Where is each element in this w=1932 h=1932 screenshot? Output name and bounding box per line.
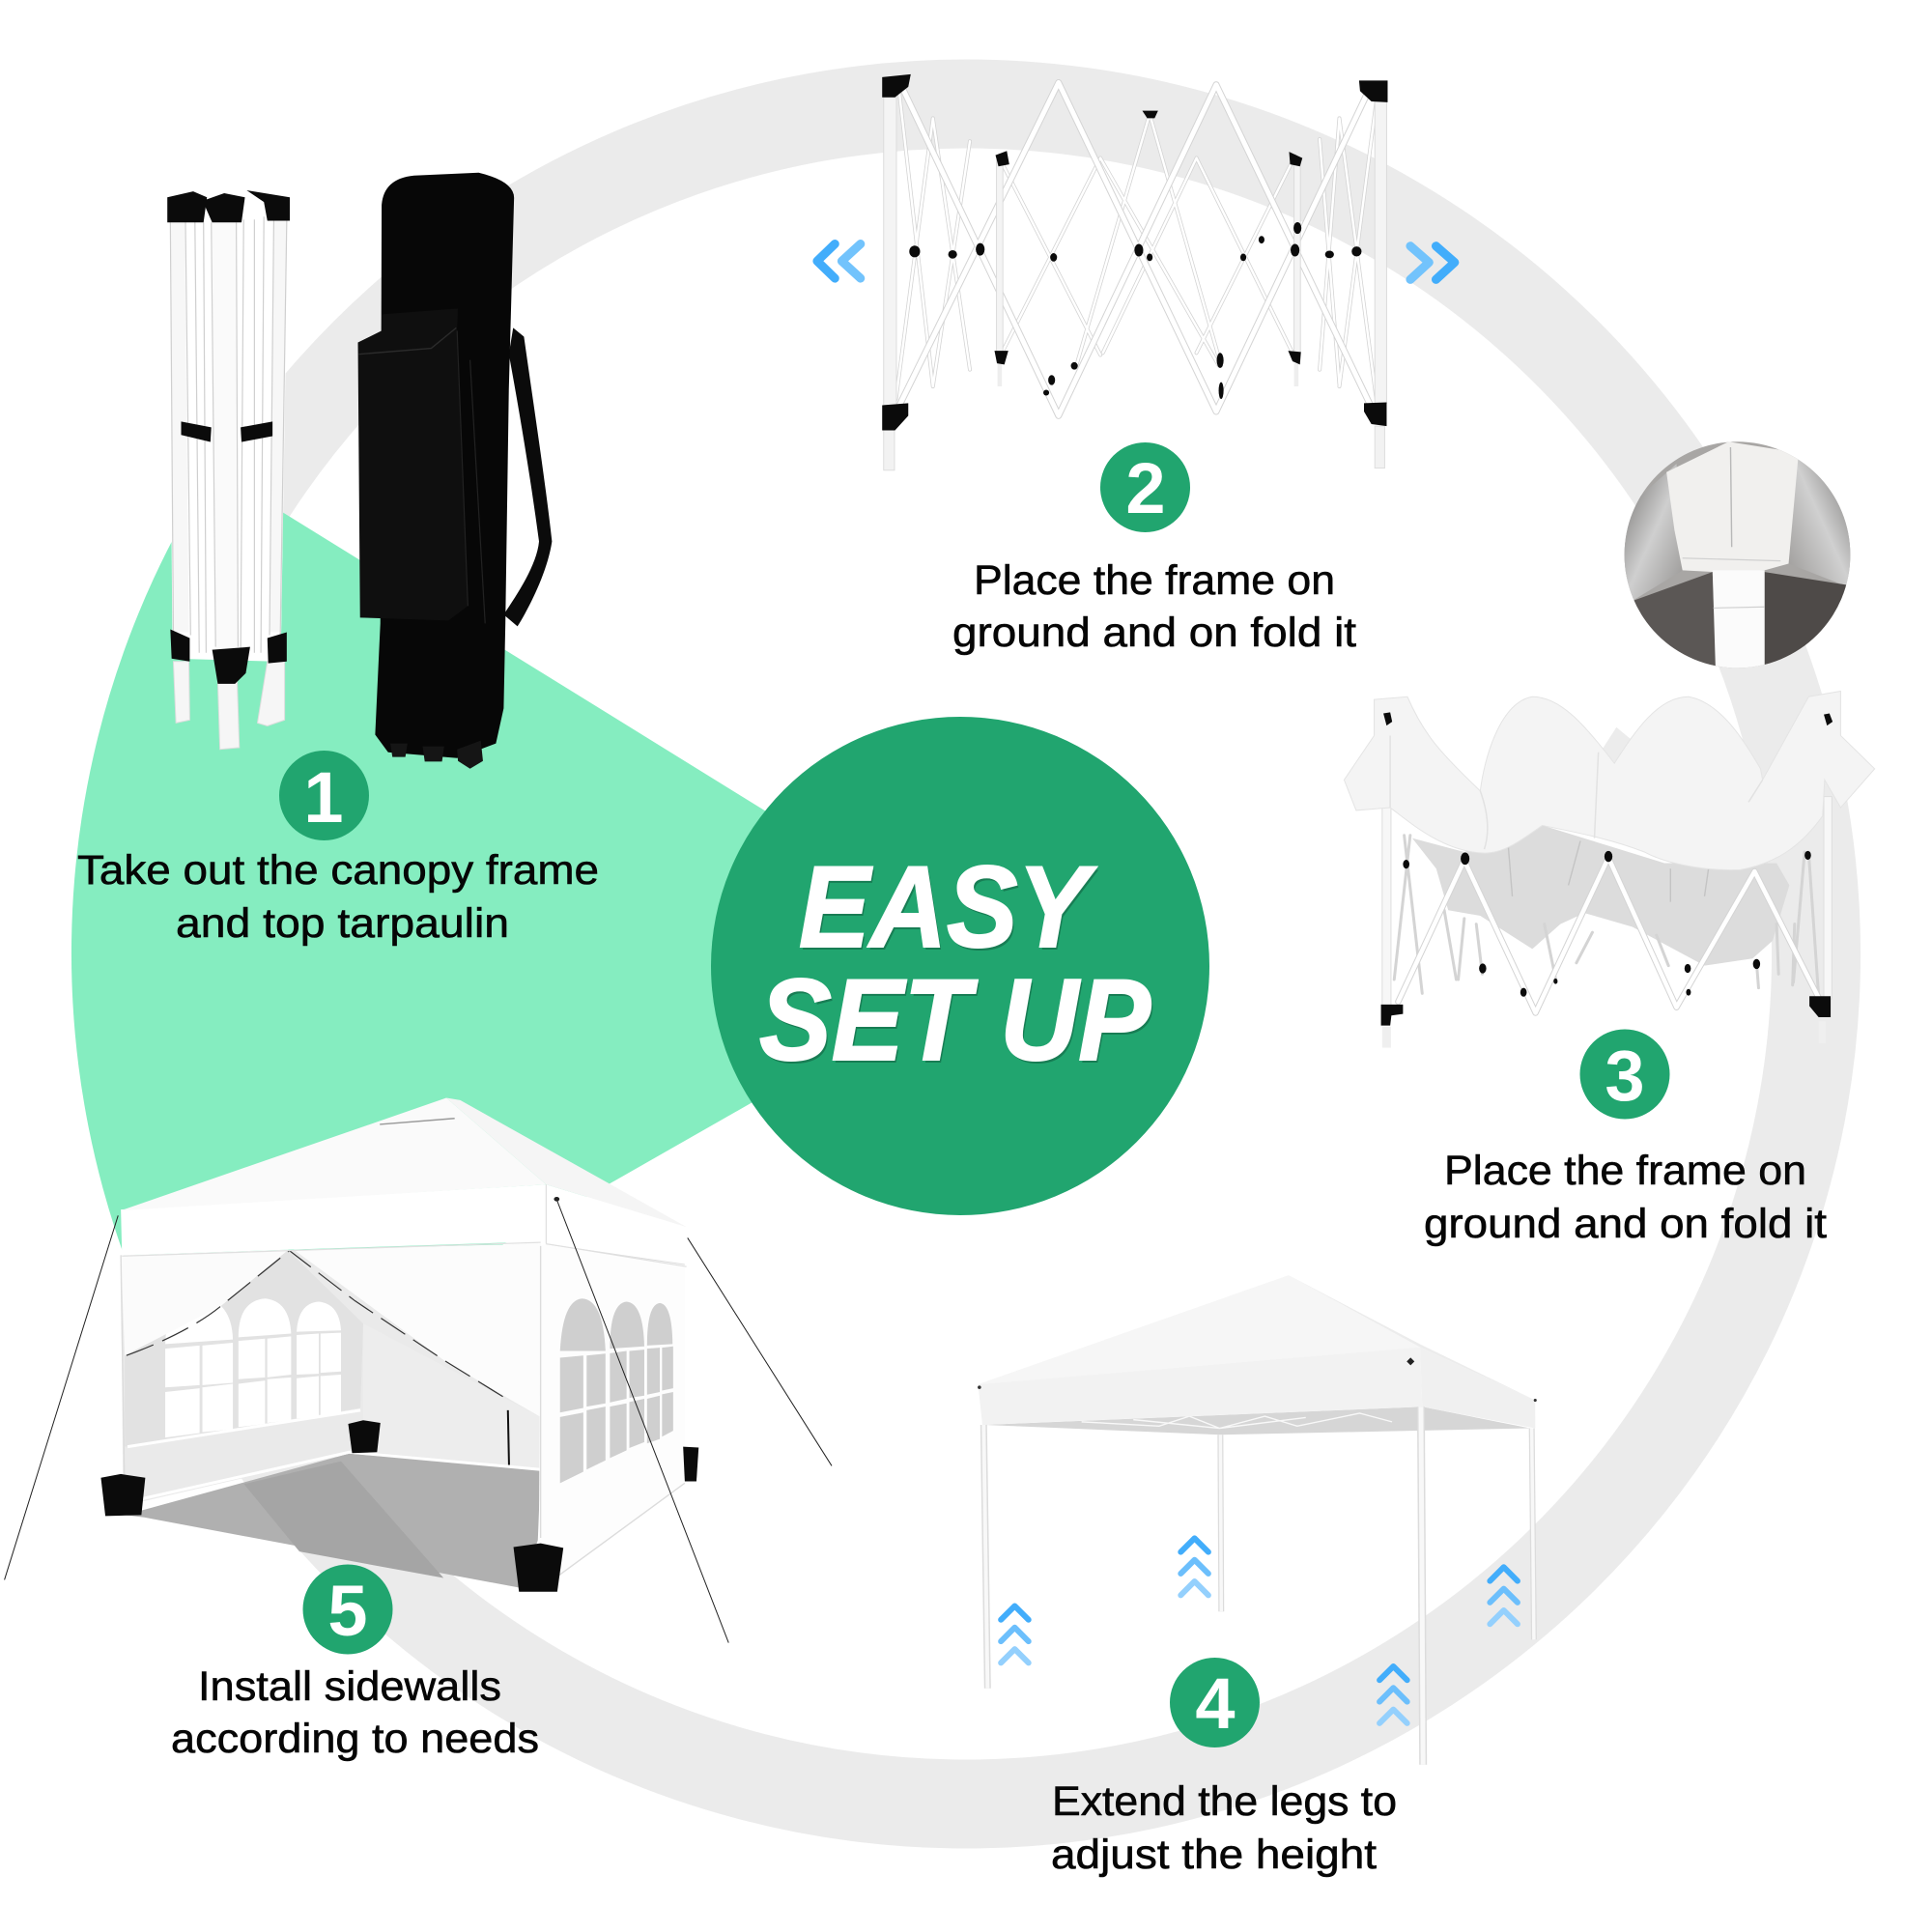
- step 5: caption: according to needs: [171, 1716, 539, 1762]
- step 3: half-open canopy: [1344, 692, 1875, 1048]
- arrows: back-right leg: [1490, 1567, 1518, 1624]
- step 5: number badge: 5: [327, 1571, 368, 1651]
- step 2: caption: [952, 557, 1356, 656]
- step 1: number badge: [279, 751, 369, 840]
- step 1: folded frame: [167, 190, 290, 750]
- step 4: fully open canopy: [978, 1275, 1537, 1765]
- step 4: number badge: [1170, 1658, 1260, 1747]
- step 3: number badge: [1580, 1030, 1669, 1119]
- step 2: caption: ground and on fold it: [952, 610, 1356, 656]
- guy lines: [5, 1198, 832, 1643]
- centre badge: easy set up: [711, 717, 1209, 1215]
- step 1: caption: [77, 847, 599, 947]
- arrows: back-left leg: [1180, 1538, 1208, 1595]
- step 3: caption: ground and on fold it: [1424, 1201, 1827, 1247]
- step 4: up arrows: [1001, 1538, 1518, 1723]
- step 4: number badge: 4: [1195, 1663, 1236, 1744]
- grey circular ring: [193, 104, 1816, 1804]
- step 3: caption: Place the frame on: [1444, 1148, 1806, 1194]
- step 2: unfolding frame: [882, 74, 1387, 470]
- arrows: front-right leg: [1379, 1666, 1407, 1723]
- step 2: left arrows: [817, 244, 861, 278]
- step 2: caption: Place the frame on: [974, 557, 1335, 604]
- step 4: caption: Extend the legs to: [1052, 1778, 1397, 1825]
- step 5: number badge: [303, 1565, 392, 1654]
- light green sector: [71, 469, 966, 1417]
- weight bags: [100, 1420, 698, 1592]
- step 2: number badge: [1100, 442, 1190, 532]
- back window: [165, 1296, 341, 1437]
- step 4: caption: adjust the height: [1051, 1832, 1377, 1878]
- centre badge: easy set up: SET UP: [761, 958, 1153, 1088]
- inset photo: corner detail: [1620, 436, 1857, 674]
- step 5: caption: Install sidewalls: [198, 1663, 501, 1710]
- centre badge: easy set up: SET UP: [759, 955, 1151, 1085]
- step 1: caption: and top tarpaulin: [176, 900, 509, 947]
- step 1: black carry bag: [358, 173, 552, 769]
- step 5: tent with sidewalls: [5, 1098, 832, 1643]
- side window: [560, 1298, 673, 1483]
- centre badge: easy set up: EASY: [801, 845, 1099, 975]
- centre badge: easy set up: EASY: [799, 842, 1097, 972]
- step 1: number badge: 1: [303, 757, 344, 838]
- step 2: right arrows: [1410, 246, 1455, 279]
- step 1: caption: Take out the canopy frame: [77, 847, 599, 894]
- arrows: front-left leg: [1001, 1605, 1029, 1662]
- step 2: number badge: 2: [1125, 448, 1166, 528]
- step 3: number badge: 3: [1605, 1036, 1645, 1116]
- step 3: caption: [1424, 1148, 1827, 1247]
- step 4: caption: [1051, 1778, 1397, 1878]
- step 5: caption: [171, 1663, 539, 1762]
